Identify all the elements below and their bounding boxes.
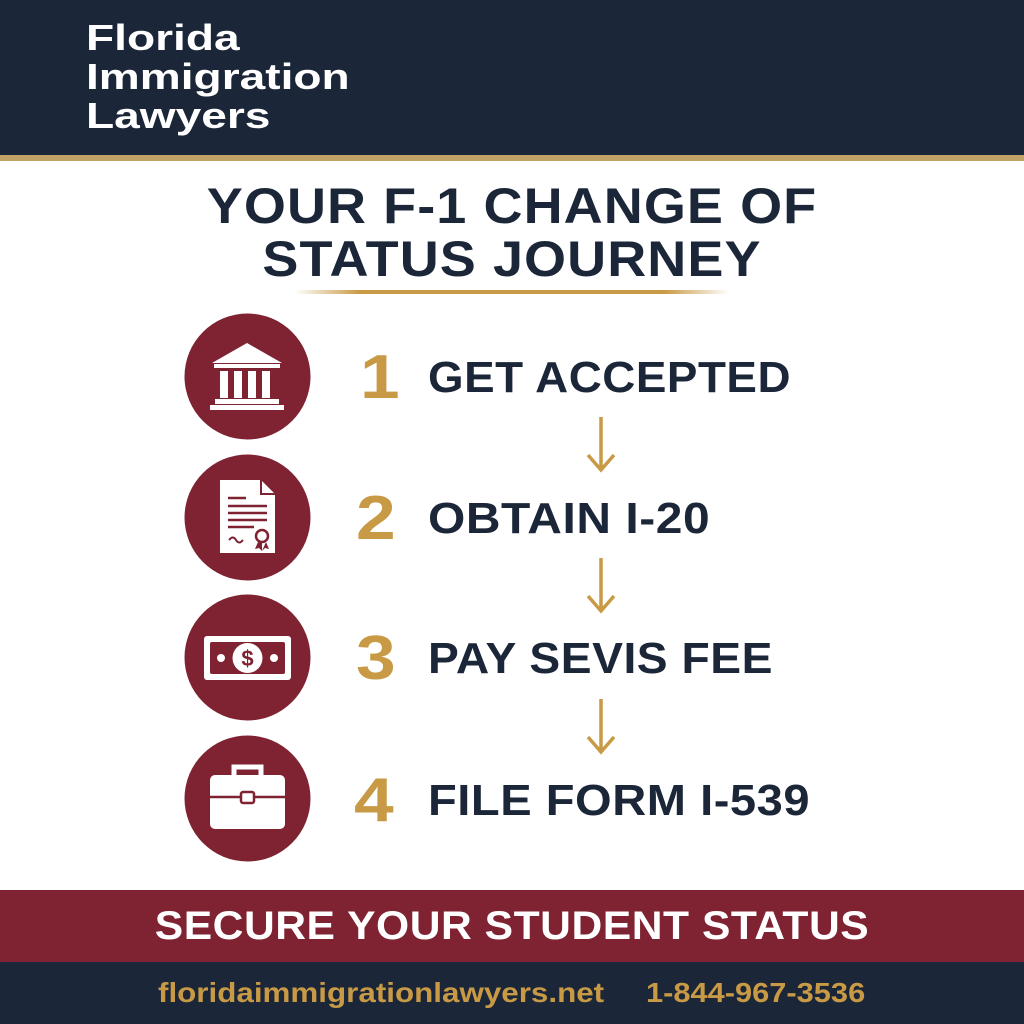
step 2 label: OBTAIN I-20 xyxy=(428,494,710,543)
brand name xyxy=(86,17,350,136)
arrow 1 xyxy=(586,417,616,472)
title: STATUS JOURNEY xyxy=(262,231,762,287)
brand name: Immigration xyxy=(86,56,350,97)
step 2 number: 2 xyxy=(356,484,396,553)
brand name: Florida xyxy=(86,17,240,58)
step 2 icon: document xyxy=(184,454,310,580)
footer contact: floridaimmigrationlawyers.net xyxy=(158,977,604,1008)
call to action band: SECURE YOUR STUDENT STATUS xyxy=(155,904,869,948)
header bar xyxy=(0,0,1024,155)
step 4 label: FILE FORM I-539 xyxy=(428,776,810,825)
step 1 number: 1 xyxy=(360,343,400,412)
step 3 number: 3 xyxy=(356,624,396,693)
footer contact xyxy=(0,962,1024,1024)
title: YOUR F-1 CHANGE OF xyxy=(207,178,817,234)
step 3 icon: money: $ xyxy=(241,646,254,671)
step 4 icon: briefcase xyxy=(184,736,310,862)
step 3 label: PAY SEVIS FEE xyxy=(428,634,773,683)
brand name: Lawyers xyxy=(86,95,270,136)
step 1 icon: building xyxy=(184,314,310,440)
arrow 3 xyxy=(586,699,616,754)
arrow 2 xyxy=(586,558,616,614)
title xyxy=(207,178,817,287)
title underline xyxy=(295,290,729,294)
step 3 icon: money xyxy=(184,594,310,720)
step 1 label: GET ACCEPTED xyxy=(428,353,791,402)
footer contact: 1-844-967-3536 xyxy=(646,977,865,1008)
call to action band xyxy=(0,890,1024,962)
step 4 number: 4 xyxy=(354,766,394,835)
